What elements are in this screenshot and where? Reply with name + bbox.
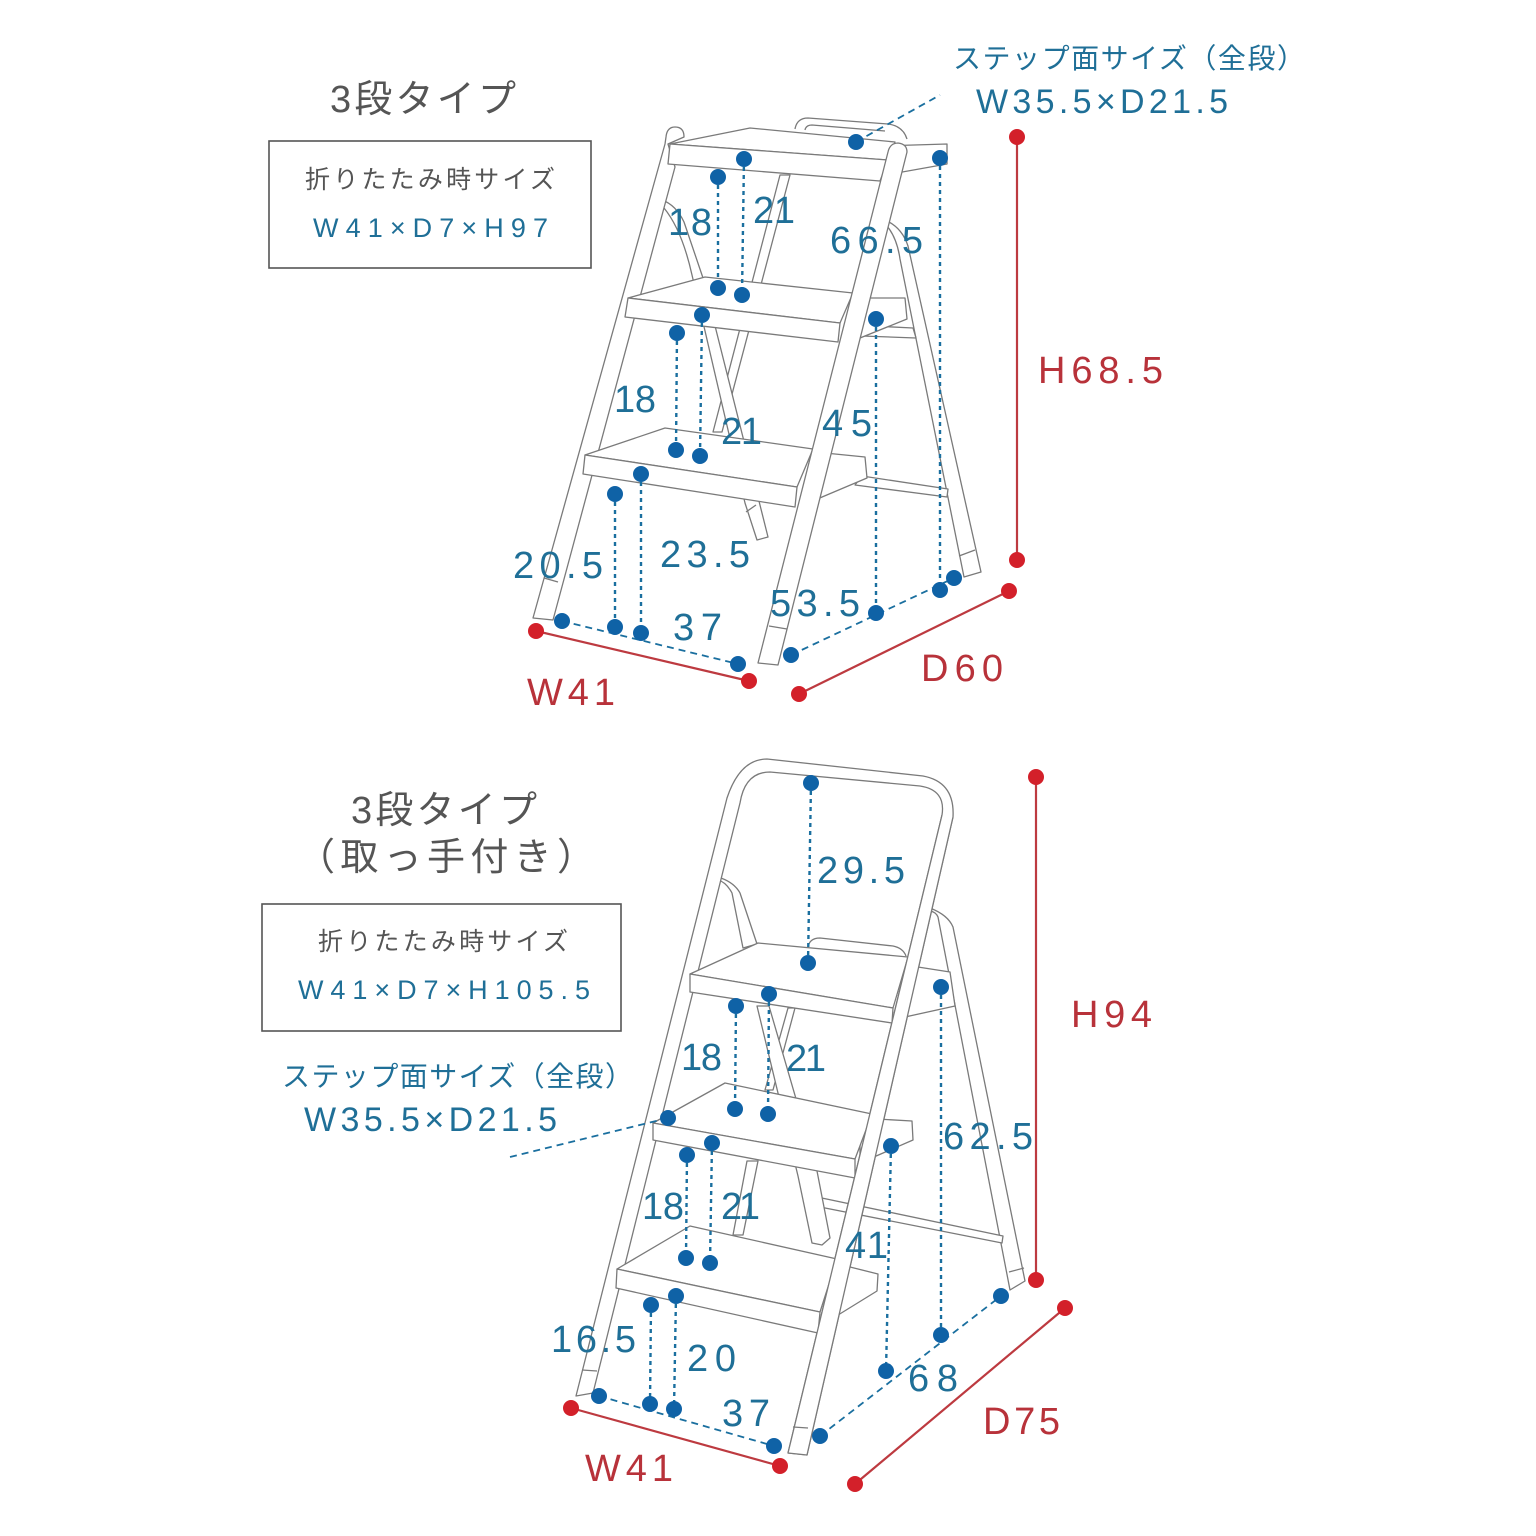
blue dimension numbers: 21 <box>786 1038 826 1080</box>
heading: lower type <box>297 790 595 879</box>
red overall dimensions: W41 <box>585 1448 673 1490</box>
folded size box: W41×D7×H105.5 <box>298 975 590 1005</box>
red overall dimensions <box>527 350 1163 714</box>
blue dimension numbers <box>513 190 923 649</box>
stool line drawing, no handle <box>533 118 981 665</box>
panel: lower stool, with handle <box>262 759 1152 1492</box>
step size note <box>953 43 1305 121</box>
blue dimension numbers: 62.5 <box>943 1116 1033 1158</box>
blue measurement dots <box>591 775 1009 1454</box>
heading: lower type: （取っ手付き） <box>297 837 595 879</box>
bottom step <box>583 428 867 507</box>
folded size box: 折りたたみ時サイズ <box>318 928 568 956</box>
blue dimension numbers: 66.5 <box>830 220 923 262</box>
red overall dimensions: W41 <box>527 672 615 714</box>
middle step <box>625 277 907 342</box>
top step <box>690 943 955 1023</box>
blue dimension numbers: 53.5 <box>770 583 860 625</box>
folded size box <box>269 141 591 268</box>
blue dimension numbers: 21 <box>753 190 795 232</box>
folded size box <box>262 904 621 1031</box>
red overall-size dots <box>563 769 1073 1492</box>
blue dimension numbers: 21 <box>721 1186 760 1228</box>
step size note: ステップ面サイズ（全段） <box>282 1061 633 1092</box>
step size note: W35.5×D21.5 <box>976 83 1228 121</box>
folded size box: W41×D7×H97 <box>313 213 548 243</box>
blue dimension numbers <box>551 850 1033 1435</box>
red overall dimensions: H94 <box>1071 994 1152 1036</box>
left front leg <box>533 127 684 620</box>
blue measurement dots <box>554 134 962 672</box>
folded size box: 折りたたみ時サイズ <box>305 166 555 194</box>
blue dimension numbers: 68 <box>908 1358 958 1400</box>
blue dimension numbers: 18 <box>614 379 656 421</box>
right front leg <box>758 143 907 665</box>
blue dimension numbers: 29.5 <box>817 850 905 892</box>
red overall dimensions: H68.5 <box>1038 350 1163 392</box>
blue dimension numbers: 21 <box>721 411 762 453</box>
dimension guides <box>536 95 1017 694</box>
top step <box>668 128 947 181</box>
blue dimension numbers: 20.5 <box>513 545 603 587</box>
blue dimension numbers: 20 <box>687 1338 736 1380</box>
red overall-size dots <box>528 129 1025 702</box>
blue dimension numbers: 16.5 <box>551 1319 636 1361</box>
red overall dimensions <box>585 994 1152 1490</box>
blue dimension numbers: 18 <box>681 1037 722 1079</box>
heading: upper type: 3段タイプ <box>330 79 516 121</box>
right front leg over steps <box>788 815 953 1455</box>
blue dimension numbers: 18 <box>668 202 712 244</box>
blue dimension numbers: 23.5 <box>660 534 750 576</box>
red overall dimensions: D75 <box>983 1401 1060 1443</box>
dimension guides <box>510 777 1065 1484</box>
heading: lower type: 3段タイプ <box>351 790 537 832</box>
stool line drawing, with handle <box>576 759 1025 1455</box>
front frame <box>576 759 953 1455</box>
blue dimension numbers: 18 <box>642 1186 684 1228</box>
blue dimension numbers: 45 <box>822 403 872 445</box>
bottom step <box>616 1226 878 1333</box>
red overall dimensions: D60 <box>921 648 1003 690</box>
step size note: W35.5×D21.5 <box>304 1101 557 1139</box>
blue dimension numbers: 37 <box>673 607 722 649</box>
blue dimension numbers: 37 <box>722 1393 770 1435</box>
step size note: ステップ面サイズ（全段） <box>953 43 1305 74</box>
middle step <box>653 1083 913 1178</box>
handle <box>808 938 906 956</box>
panel: upper stool, no handle <box>269 43 1305 714</box>
step size note <box>282 1061 633 1139</box>
blue dimension numbers: 41 <box>845 1225 888 1267</box>
